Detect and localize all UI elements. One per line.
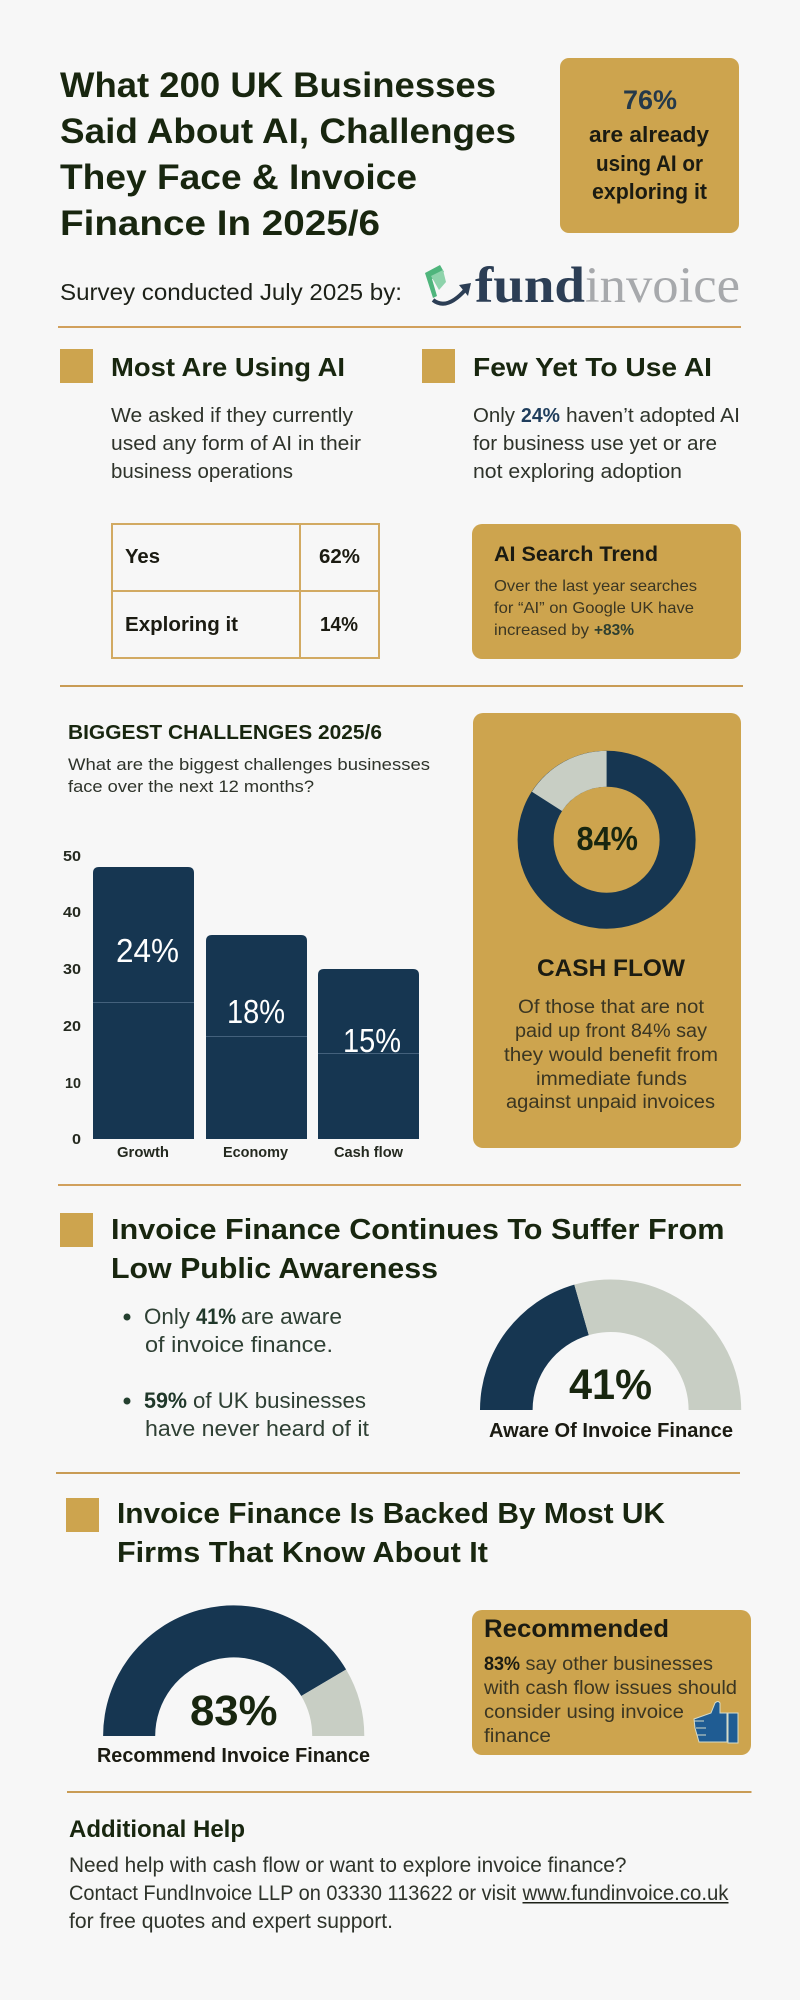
icon: square marker (60, 1213, 93, 1247)
gauge chart: 41% aware: 41% (569, 1361, 652, 1409)
text block: for free quotes and expert support. (69, 1910, 393, 1933)
text block: immediate funds (536, 1069, 687, 1090)
table: 14% (320, 614, 358, 636)
donut chart: 84% (576, 820, 638, 857)
callout: 76% using AI (560, 58, 739, 233)
text block: Contact FundInvoice LLP on 03330 113622 or visit (69, 1882, 516, 1905)
panel: cash flow (473, 713, 741, 1148)
bar: cash flow: Cash flow (334, 1144, 403, 1161)
panel: low public awareness (60, 1213, 741, 1442)
title (60, 66, 516, 243)
callout: AI search trend: Over the last year searches (494, 578, 697, 595)
callout: recommended: Recommended (484, 1615, 669, 1643)
text block: www.fundinvoice.co.uk (522, 1882, 729, 1905)
callout: AI search trend: increased by (494, 622, 589, 639)
gauge chart: 41% aware: Aware Of Invoice Finance (489, 1420, 733, 1442)
icon: square marker (66, 1498, 99, 1532)
donut chart (532, 751, 678, 911)
title: They Face & Invoice (60, 158, 417, 197)
bar: economy (206, 935, 307, 1161)
bar: economy: Economy (223, 1144, 289, 1161)
text block: they would benefit from (504, 1045, 718, 1066)
text block: face over the next 12 months? (68, 777, 314, 796)
bullet list: 59% (144, 1388, 187, 1413)
panel: backed by most UK firms (66, 1498, 751, 1767)
heading: Additional Help (69, 1816, 245, 1843)
gauge chart: 83% recommend (97, 1605, 370, 1767)
survey credit: Survey conducted July 2025 by: (60, 279, 402, 305)
text block: haven’t adopted AI (566, 405, 740, 427)
logo: fundinvoice: invoice (585, 258, 740, 314)
bar: growth: Growth (117, 1144, 169, 1161)
heading (111, 1214, 724, 1285)
callout: AI search trend: AI Search Trend (494, 543, 658, 566)
callout: 76% using AI: 76% (623, 85, 677, 115)
y axis labels: 0 (72, 1131, 81, 1148)
text block (68, 755, 430, 796)
table (111, 524, 380, 658)
panel: biggest challenges (63, 722, 430, 1161)
text block: 24% (521, 405, 560, 427)
heading: Firms That Know About It (117, 1537, 488, 1569)
text block: used any form of AI in their (111, 433, 361, 455)
text block: Only (473, 405, 515, 427)
callout: recommended: finance (484, 1726, 551, 1747)
bullet list: of UK businesses (193, 1388, 366, 1413)
heading: Invoice Finance Continues To Suffer From (111, 1214, 724, 1246)
text block: for business use yet or are (473, 433, 717, 455)
bar: growth (93, 867, 194, 1161)
bullet list: Only (144, 1304, 190, 1329)
heading: Low Public Awareness (111, 1253, 438, 1285)
heading: Invoice Finance Is Backed By Most UK (117, 1498, 665, 1530)
text block: Of those that are not (518, 997, 705, 1018)
gauge chart: 41% aware (480, 1279, 741, 1442)
text block: paid up front 84% say (515, 1021, 708, 1042)
icon: square marker (422, 349, 455, 383)
callout: 76% using AI: are already (589, 122, 710, 147)
icon: banknotes and arrow (425, 265, 471, 304)
text block: business operations (111, 461, 293, 483)
heading: BIGGEST CHALLENGES 2025/6 (68, 722, 382, 744)
panel: most are using AI (60, 349, 380, 658)
text block: Need help with cash flow or want to explore invoice finance? (69, 1854, 626, 1877)
heading: Few Yet To Use AI (473, 352, 712, 382)
bullet list: have never heard of it (145, 1416, 369, 1441)
logo: fundinvoice (425, 258, 740, 314)
panel: few yet to use AI (422, 349, 741, 659)
callout: 76% using AI: exploring it (592, 179, 708, 204)
callout: recommended: consider using invoice (484, 1702, 684, 1723)
callout: AI search trend: +83% (594, 622, 634, 639)
gauge chart: 83% recommend: 83% (190, 1687, 278, 1735)
table: 62% (319, 546, 360, 568)
bar: economy: 18% (227, 993, 285, 1030)
heading: CASH FLOW (537, 955, 685, 982)
callout: recommended: with cash flow issues should (483, 1678, 737, 1699)
bullet list: of invoice finance. (145, 1332, 333, 1357)
icon: square marker (60, 349, 93, 383)
bar: cash flow: 15% (343, 1022, 401, 1059)
text block (504, 997, 718, 1113)
callout: AI search trend: for “AI” on Google UK have (494, 600, 694, 617)
y axis labels: 30 (63, 961, 81, 978)
text block (69, 1854, 729, 1933)
text block: What are the biggest challenges businesses (68, 755, 430, 774)
gauge chart: 83% recommend: Recommend Invoice Finance (97, 1745, 370, 1767)
text block (111, 405, 361, 483)
text block: against unpaid invoices (506, 1092, 715, 1113)
callout: recommended: 83% (484, 1654, 520, 1675)
y axis labels: 40 (63, 904, 81, 921)
y axis labels (63, 848, 81, 1148)
callout: 76% using AI: using AI or (596, 151, 703, 176)
text block: We asked if they currently (111, 405, 353, 427)
bullet list: 41% (196, 1304, 236, 1329)
bar chart (63, 848, 419, 1161)
bullet list (124, 1304, 369, 1441)
text block (473, 405, 740, 483)
heading: Most Are Using AI (111, 352, 345, 382)
callout: recommended (472, 1610, 751, 1755)
bullet list: are aware (241, 1304, 342, 1329)
title: Said About AI, Challenges (60, 112, 516, 151)
text block: not exploring adoption (473, 461, 682, 483)
callout: recommended: say other businesses (526, 1654, 713, 1675)
heading (117, 1498, 665, 1569)
table: Yes (125, 546, 160, 568)
callout: AI search trend (472, 524, 741, 659)
title: What 200 UK Businesses (60, 66, 496, 105)
logo: fundinvoice: fund (475, 258, 585, 314)
y axis labels: 10 (65, 1075, 81, 1092)
title: Finance In 2025/6 (60, 204, 380, 243)
bar: cash flow (318, 969, 419, 1161)
icon: thumbs up (694, 1702, 738, 1743)
bar: growth: 24% (116, 932, 179, 969)
panel: additional help (69, 1816, 729, 1933)
table: Exploring it (125, 614, 238, 636)
y axis labels: 20 (63, 1018, 81, 1035)
y axis labels: 50 (63, 848, 81, 865)
